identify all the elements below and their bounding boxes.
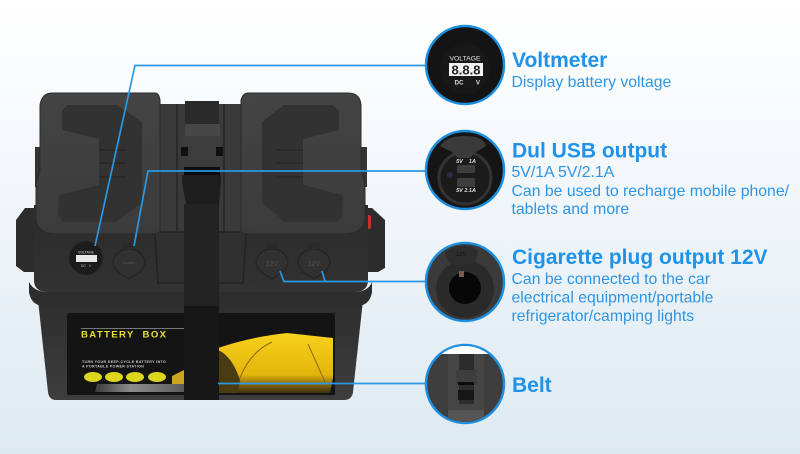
detail circle: cigarette plug [426,243,504,321]
right lid [241,93,365,234]
heading: Voltmeter [512,49,607,72]
heading: Cigarette plug output 12V [512,246,768,269]
detail circle: USB [426,131,504,209]
right lid ribs [276,150,303,177]
product label [67,313,335,395]
detail circle: voltmeter: V [476,80,481,86]
heading: Dul USB output [512,140,667,162]
body rim [29,282,372,306]
battery box [16,93,385,400]
left lid recess [58,105,142,222]
voltmeter port: VOLTAGE [78,250,95,254]
12V port 1: 12V [266,261,279,268]
body [38,300,363,400]
description: tablets and more [512,201,629,218]
red latch [367,215,371,229]
label tent photo [218,333,333,393]
upper shell [34,205,368,292]
label subtitle: TURN YOUR DEEP-CYCLE BATTERY INTO [82,360,166,364]
left lid [36,93,160,234]
description: Display battery voltage [512,74,672,91]
centre lid section [158,104,242,233]
USB port [113,243,145,279]
detail circle: voltmeter: DC [455,80,464,86]
label title: BATTERY BOX [81,330,167,340]
detail circle: voltmeter: VOLTAGE [449,56,481,62]
detail circle: belt [425,344,505,424]
connector: USB [134,171,428,246]
side handle: right [366,208,385,272]
description: Can be used to recharge mobile phone/ [512,183,790,200]
connector: 12V [280,271,428,282]
description: 5V/1A 5V/2.1A [512,164,615,181]
detail circle: voltmeter [426,26,504,104]
feature text: voltmeter [512,49,672,91]
12V port 1 [256,243,288,279]
voltmeter port [69,241,103,275]
product label: A PORTABLE POWER STATION [82,364,144,368]
connector: voltmeter [95,66,428,246]
detail circle: USB: 5V 2.1A [456,188,476,194]
feature text: USB [512,140,790,218]
12V port 2: 12V [308,261,321,268]
detail circle: USB: 5V 1A [456,159,476,165]
left lid ribs [99,150,126,177]
lid side tabs [35,147,367,187]
side handle: left [16,208,36,272]
description: refrigerator/camping lights [512,308,694,325]
feature text: cigarette plug [512,246,768,325]
belt [181,101,223,306]
description: Can be connected to the car [512,271,710,288]
12V port 2 [298,243,330,279]
detail circle: voltmeter: 8.8.8 [452,62,480,78]
connector: belt [218,382,428,384]
centre recess [155,232,246,283]
label icons [84,372,166,382]
voltmeter port: DC V [81,264,92,268]
right lid recess [262,105,343,222]
detail circle: cigarette plug: 12V [456,252,466,258]
feature text: belt: Belt [512,374,552,397]
belt lower over label [184,306,219,400]
description: electrical equipment/portable [512,290,714,306]
